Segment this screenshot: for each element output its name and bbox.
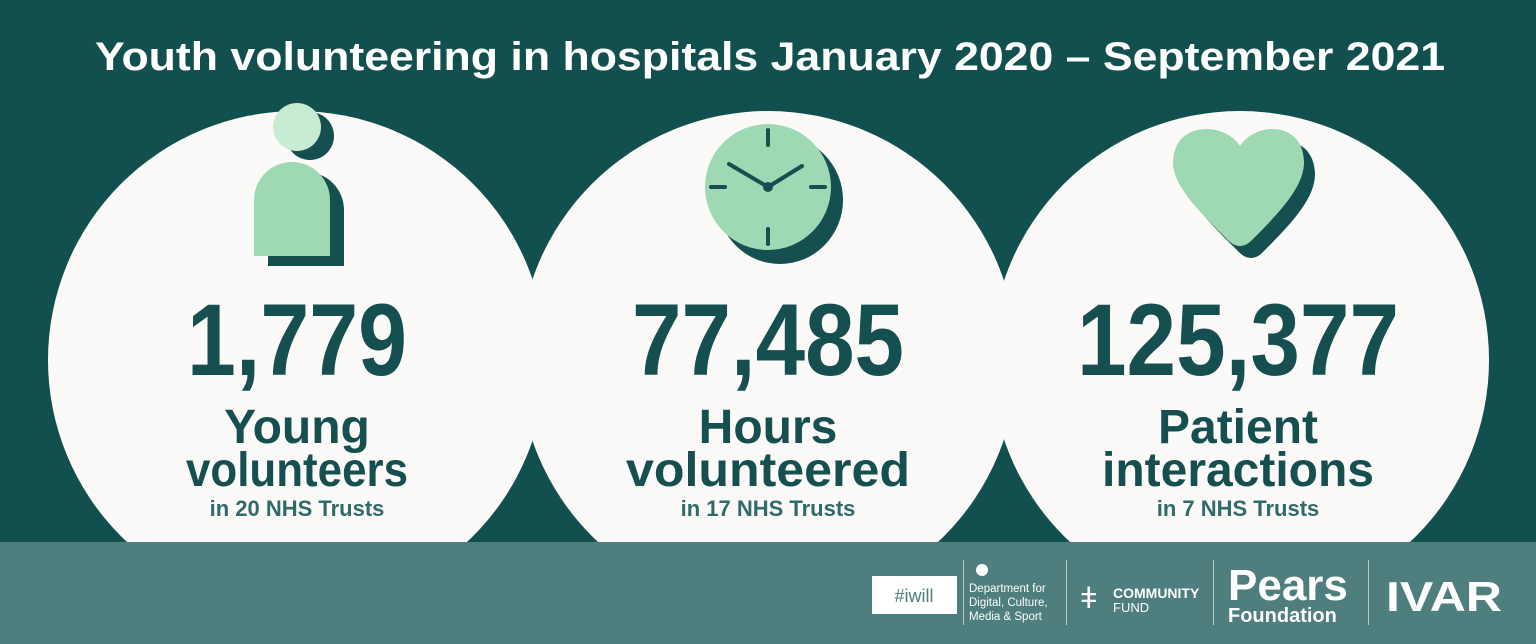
logo: community fund: [1080, 582, 1200, 615]
stat: hours volunteered: [626, 283, 910, 521]
stat: young volunteers: 1,779: [187, 283, 407, 397]
footer band: [0, 542, 1536, 644]
logo: iwill: #iwill: [894, 586, 934, 606]
logo: community fund: ǂ: [1080, 582, 1098, 615]
logo: IVAR: IVAR: [1386, 573, 1502, 620]
logos: [872, 560, 1502, 627]
logo: DCMS: Media & Sport: [969, 611, 1043, 623]
title: Youth volunteering in hospitals January 2020 – September 2021: [95, 35, 1445, 79]
icon: person: [254, 103, 344, 266]
icon: clock: [705, 124, 843, 264]
circles background: [48, 111, 1489, 542]
logo: pears foundation: Pears: [1228, 561, 1348, 610]
stat: hours volunteered: Hours: [699, 401, 837, 454]
logo: community fund: COMMUNITY: [1113, 585, 1200, 601]
stat: patient interactions: [1077, 283, 1399, 521]
stat: patient interactions: in 7 NHS Trusts: [1157, 496, 1319, 521]
logo: pears foundation: Foundation: [1228, 605, 1337, 627]
stat: young volunteers: [186, 283, 408, 521]
stat: patient interactions: Patient: [1158, 401, 1318, 454]
logo: community fund: FUND: [1113, 600, 1149, 615]
stat: hours volunteered: volunteered: [626, 444, 910, 497]
stat: patient interactions: 125,377: [1077, 283, 1399, 397]
stat: patient interactions: interactions: [1102, 444, 1374, 497]
stat: young volunteers: volunteers: [186, 444, 408, 497]
logo: DCMS: Digital, Culture,: [969, 597, 1048, 609]
logo: DCMS: [969, 564, 1048, 623]
icon: heart: [1173, 129, 1315, 258]
logo: DCMS: Department for: [969, 583, 1046, 595]
stat: hours volunteered: in 17 NHS Trusts: [681, 496, 855, 521]
stat: young volunteers: Young: [224, 401, 370, 454]
stat: hours volunteered: 77,485: [632, 283, 904, 397]
logo: iwill: [872, 576, 957, 614]
stat: young volunteers: in 20 NHS Trusts: [210, 496, 384, 521]
